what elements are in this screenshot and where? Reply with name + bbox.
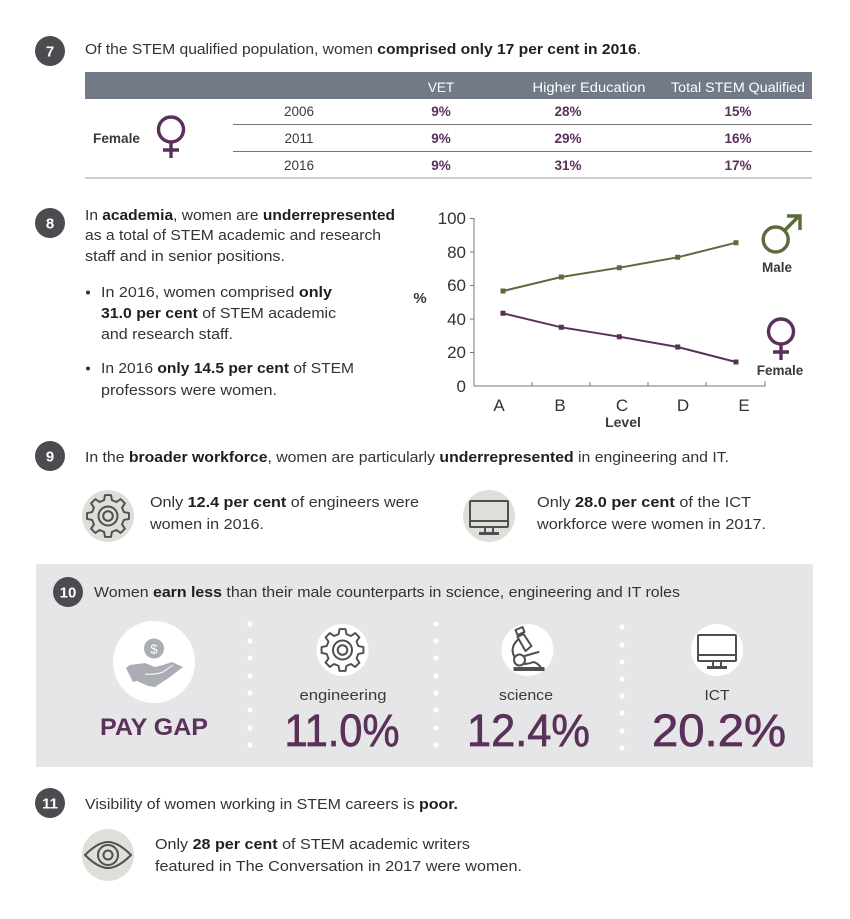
y axis labels: 40 bbox=[447, 310, 466, 329]
ICT pay gap value: 20.2% bbox=[652, 705, 786, 756]
chart axes bbox=[470, 218, 765, 386]
y axis labels: 100 bbox=[438, 209, 466, 228]
section 8 text: staff and in senior positions. bbox=[85, 249, 285, 265]
y axis labels: 0 bbox=[457, 377, 466, 396]
section 9 badge bbox=[35, 441, 65, 471]
section 7 badge bbox=[35, 36, 65, 66]
male series bbox=[500, 240, 738, 294]
row 2006 bbox=[284, 104, 752, 119]
icon: hand with coin bbox=[113, 621, 195, 703]
section 8 text: In 2016, women comprised only bbox=[101, 285, 332, 301]
row 2011: 29% bbox=[554, 131, 582, 146]
section 8 badge: 8 bbox=[46, 216, 54, 232]
row 2011: 2011 bbox=[284, 131, 314, 146]
section 8 text: In academia , women are underrepresented bbox=[85, 208, 395, 224]
female series bbox=[500, 311, 738, 364]
science label: science bbox=[499, 688, 553, 704]
icon: female symbol bbox=[768, 319, 794, 360]
section 8 text: as a total of STEM academic and research bbox=[85, 228, 381, 244]
section 10 heading: Women earn less than their male counterparts in science, engineering and IT roles bbox=[94, 585, 680, 601]
section 11 badge: 11 bbox=[42, 796, 58, 812]
panel: pay gap bbox=[36, 564, 813, 767]
visibility statistic bbox=[155, 837, 522, 875]
row 2016: 17% bbox=[724, 158, 752, 173]
row 2006: 28% bbox=[554, 104, 582, 119]
section 11 heading: Visibility of women working in STEM careers is poor. bbox=[85, 797, 458, 813]
icon: gear bbox=[82, 490, 134, 542]
engineers statistic: women in 2016. bbox=[149, 517, 264, 533]
engineers statistic bbox=[149, 495, 419, 533]
table header: VET bbox=[428, 80, 454, 95]
row 2006: 15% bbox=[724, 104, 752, 119]
ICT label: ICT bbox=[704, 688, 730, 704]
icon: computer monitor bbox=[463, 490, 515, 542]
section 8 text: In 2016 only 14.5 per cent of STEM bbox=[101, 361, 354, 377]
icon: gear bbox=[316, 624, 368, 676]
ICT statistic bbox=[536, 495, 766, 533]
x axis labels: A bbox=[493, 396, 505, 415]
row 2016: 2016 bbox=[284, 158, 314, 173]
x axis labels: C bbox=[616, 396, 628, 415]
y axis labels: 80 bbox=[447, 243, 466, 262]
section 8 text: 31.0 per cent of STEM academic bbox=[101, 306, 336, 322]
visibility statistic: featured in The Conversation in 2017 were women. bbox=[155, 859, 522, 875]
row 2011 bbox=[284, 131, 752, 146]
engineers statistic: Only 12.4 per cent of engineers were bbox=[150, 495, 419, 511]
y axis labels bbox=[438, 209, 466, 396]
icon: computer monitor bbox=[691, 624, 743, 676]
section 8 text: professors were women. bbox=[101, 383, 277, 399]
row 2016 bbox=[284, 158, 752, 173]
table header bbox=[85, 72, 812, 99]
section 10 badge bbox=[53, 577, 83, 607]
section 8 badge bbox=[35, 208, 65, 238]
pay gap title: PAY GAP bbox=[100, 714, 208, 741]
table header: Total STEM Qualified bbox=[671, 80, 805, 95]
ICT statistic: Only 28.0 per cent of the ICT bbox=[537, 495, 751, 511]
icon: microscope bbox=[502, 624, 554, 676]
female label: Female bbox=[757, 363, 804, 378]
icon: eye bbox=[82, 829, 134, 881]
row 2016: 9% bbox=[431, 158, 451, 173]
line chart: male and female by level bbox=[413, 209, 804, 430]
y axis unit: % bbox=[413, 290, 427, 307]
icon: hand with coin: $ bbox=[150, 642, 158, 656]
section 9 badge: 9 bbox=[46, 448, 54, 466]
engineering pay gap value: 11.0% bbox=[284, 705, 400, 756]
science pay gap value: 12.4% bbox=[467, 705, 590, 756]
section 10 badge: 10 bbox=[60, 584, 76, 602]
male label: Male bbox=[762, 260, 792, 275]
x axis labels: D bbox=[677, 396, 689, 415]
ICT statistic: workforce were women in 2017. bbox=[536, 517, 766, 533]
table: STEM qualified females bbox=[85, 72, 812, 178]
row 2011: 16% bbox=[724, 131, 752, 146]
section 7 badge: 7 bbox=[46, 44, 54, 60]
row 2006: 9% bbox=[431, 104, 451, 119]
y axis labels: 60 bbox=[447, 276, 466, 295]
x axis labels: B bbox=[554, 396, 566, 415]
section 11 badge bbox=[35, 788, 65, 818]
row 2006: 2006 bbox=[284, 104, 314, 119]
row 2016: 31% bbox=[554, 158, 582, 173]
row 2011: 9% bbox=[431, 131, 451, 146]
engineering label: engineering bbox=[300, 688, 386, 704]
section 8 text bbox=[85, 208, 395, 399]
section 9 heading: In the broader workforce , women are particularly underrepresented in engineering and IT. bbox=[85, 450, 729, 466]
x axis labels: E bbox=[738, 396, 750, 415]
visibility statistic: Only 28 per cent of STEM academic writers bbox=[155, 837, 470, 853]
section 7 heading: Of the STEM qualified population, women comprised only 17 per cent in 2016 . bbox=[85, 42, 641, 58]
table header: Higher Education bbox=[532, 80, 646, 95]
x axis title: Level bbox=[605, 414, 641, 430]
icon: male symbol bbox=[763, 216, 800, 252]
x axis labels bbox=[493, 396, 750, 415]
icon: female symbol bbox=[158, 117, 184, 158]
section 8 text: and research staff. bbox=[101, 327, 233, 343]
female row label: Female bbox=[93, 131, 140, 146]
y axis labels: 20 bbox=[447, 343, 466, 362]
